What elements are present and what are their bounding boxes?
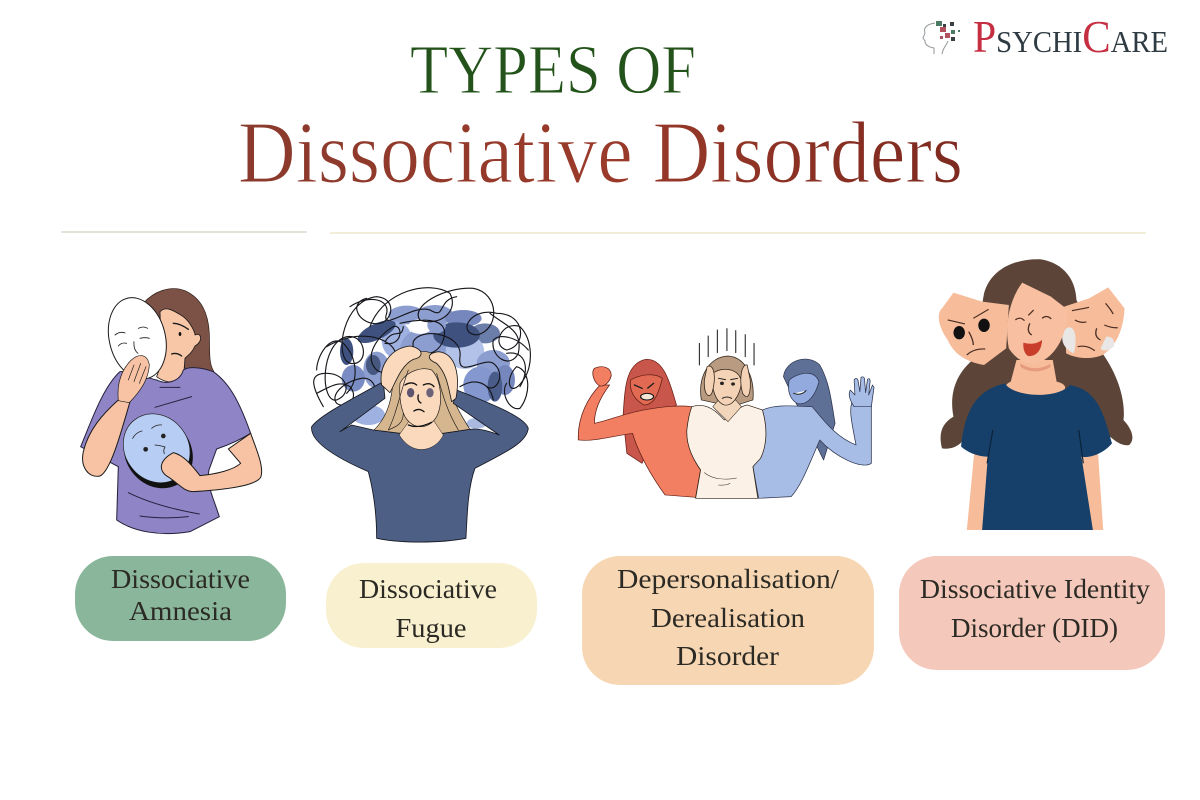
logo wordmark: PSYCHICARE <box>973 11 1168 62</box>
raised fist <box>593 367 611 386</box>
pill: Depersonalisation/Derealisation Disorder: Depersonalisation/ <box>617 564 840 594</box>
pill: Dissociative Amnesia: Amnesia <box>129 596 232 626</box>
pill: Dissociative Amnesia: Dissociative <box>111 564 250 594</box>
angry face <box>939 293 1009 365</box>
pill: Dissociative Identity Disorder: Dissociative Identity <box>920 574 1151 604</box>
logo: PsychiCare <box>923 11 1168 62</box>
eye and brows <box>179 332 181 336</box>
central self <box>687 356 766 498</box>
face and neck <box>157 309 201 382</box>
divider right <box>330 232 1146 234</box>
blue top <box>961 383 1112 530</box>
pill: Depersonalisation/Derealisation Disorder: Disorder <box>676 641 779 671</box>
facial features <box>405 383 434 426</box>
thought blobs <box>340 305 515 429</box>
scribbles <box>314 288 530 409</box>
left arm <box>83 400 130 476</box>
hair strands <box>388 370 458 430</box>
hair back <box>373 351 471 435</box>
sad face <box>1062 287 1125 358</box>
illustration: overwhelmed woman with scribbles <box>312 288 530 542</box>
face <box>400 369 441 427</box>
title: dissociative disorders: Dissociative Disorders <box>238 105 963 202</box>
hands <box>381 346 421 393</box>
sweater <box>312 382 528 542</box>
title: types of: TYPES OF <box>410 32 696 109</box>
pill: Dissociative Fugue <box>326 563 537 648</box>
divider left <box>61 231 307 233</box>
blue self <box>753 359 874 498</box>
red self <box>578 359 701 497</box>
illustration: three selves <box>578 329 874 498</box>
illustration: woman with three faces <box>939 259 1132 530</box>
pill: Depersonalisation/Derealisation Disorder: Derealisation <box>651 603 806 633</box>
shirt <box>81 368 251 534</box>
pill: Dissociative Fugue: Dissociative <box>359 574 497 604</box>
open hand <box>849 377 874 407</box>
arms <box>967 450 1103 530</box>
pill: Dissociative Identity Disorder: Disorder (DID) <box>951 613 1118 643</box>
pill: Dissociative Amnesia <box>75 556 286 641</box>
pill: Dissociative Identity Disorder <box>899 556 1165 670</box>
stress lines <box>699 329 754 365</box>
blue mask <box>110 400 207 502</box>
neck and chest <box>399 420 443 450</box>
laughing face <box>1007 283 1068 371</box>
right arm and hand <box>161 433 262 492</box>
pill: Dissociative Fugue: Fugue <box>396 613 467 643</box>
icon: head with network <box>923 21 960 54</box>
white mask <box>100 291 174 385</box>
shirt creases <box>128 387 199 518</box>
neck <box>1006 360 1065 398</box>
hair <box>143 289 214 372</box>
illustration: woman holding masks <box>81 289 262 534</box>
hand on white mask <box>118 356 149 403</box>
pill: Depersonalisation/Derealisation Disorder <box>582 556 874 685</box>
long hair <box>941 259 1132 449</box>
